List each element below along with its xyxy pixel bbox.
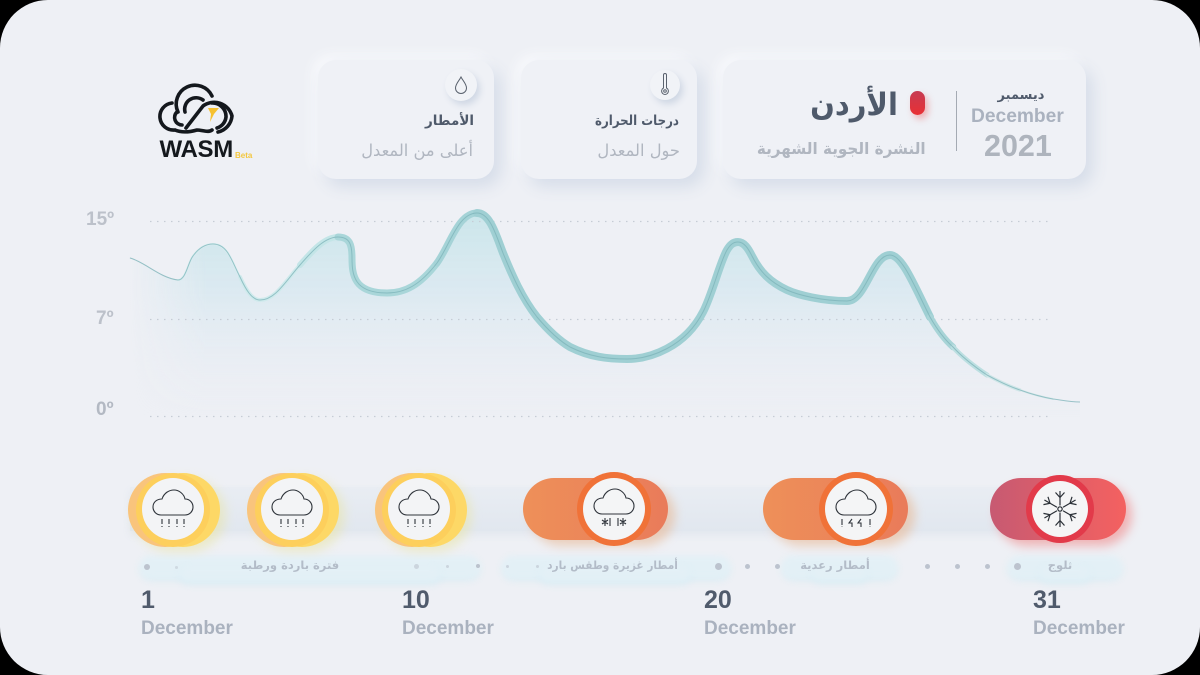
panel: rain xyxy=(318,60,494,179)
icon: thunder rain xyxy=(763,472,915,546)
axis label: 15: 15º xyxy=(86,209,114,230)
date: 31 December: December xyxy=(1033,618,1125,639)
axis label: 0: 0º xyxy=(96,399,114,420)
icon: red marker xyxy=(910,91,925,115)
grid lines xyxy=(150,222,1048,416)
date: 31 December: 31 xyxy=(1033,586,1061,614)
date: year: 2021 xyxy=(984,129,1052,163)
date: 1 December xyxy=(141,586,233,639)
subtitle: monthly bulletin: النشرة الجوية الشهرية xyxy=(757,139,926,158)
phase label: cold humid: فترة باردة ورطبة xyxy=(241,558,339,572)
icon: rain 1 xyxy=(128,473,226,552)
date block xyxy=(971,88,1064,163)
phase label: thunder rain: أمطار رعدية xyxy=(800,558,870,572)
icon: snow xyxy=(990,475,1132,546)
timeline band xyxy=(130,487,1080,531)
date: 1 December: 1 xyxy=(141,586,155,614)
icon: water drop xyxy=(445,69,477,101)
panel: title xyxy=(723,60,1086,179)
chart: temperature curve xyxy=(130,209,1080,418)
date: 10 December: December xyxy=(402,618,494,639)
logo wordmark: WASM xyxy=(160,136,233,163)
date: 20 December: December xyxy=(704,618,796,639)
heading: rain: الأمطار xyxy=(425,113,474,129)
title: Jordan: الأردن xyxy=(810,87,898,123)
date: 31 December xyxy=(1033,586,1125,639)
date: 10 December xyxy=(402,586,494,639)
panel: temperature xyxy=(521,60,697,179)
icon: heavy rain with snow xyxy=(523,472,675,546)
text: above average: أعلى من المعدل xyxy=(361,141,473,160)
phase label: heavy rain cold: أمطار غزيرة وطقس بارد xyxy=(547,558,678,572)
date: Arabic month: ديسمبر xyxy=(998,88,1044,103)
logo: WASM xyxy=(158,83,252,163)
text: around average: حول المعدل xyxy=(597,141,680,160)
date: 10 December: 10 xyxy=(402,586,430,614)
date: English month: December xyxy=(971,106,1064,127)
phase label: snow: ثلوج xyxy=(1048,558,1072,572)
axis label: 7: 7º xyxy=(96,308,114,329)
chart center line xyxy=(130,213,1080,402)
logo beta tag: Beta xyxy=(235,151,252,160)
icon: rain 2 xyxy=(247,473,345,552)
weather icons xyxy=(128,472,1137,556)
date: 20 December: 20 xyxy=(704,586,732,614)
chart line band xyxy=(130,213,1053,399)
icon: rain 3 xyxy=(375,473,472,552)
date: 20 December xyxy=(704,586,796,639)
heading: temperatures: درجات الحرارة xyxy=(595,113,679,129)
icon: cloud logo mark xyxy=(158,83,234,134)
chart area fill xyxy=(158,216,940,341)
icon: thermometer xyxy=(650,70,680,100)
date: 1 December: December xyxy=(141,618,233,639)
